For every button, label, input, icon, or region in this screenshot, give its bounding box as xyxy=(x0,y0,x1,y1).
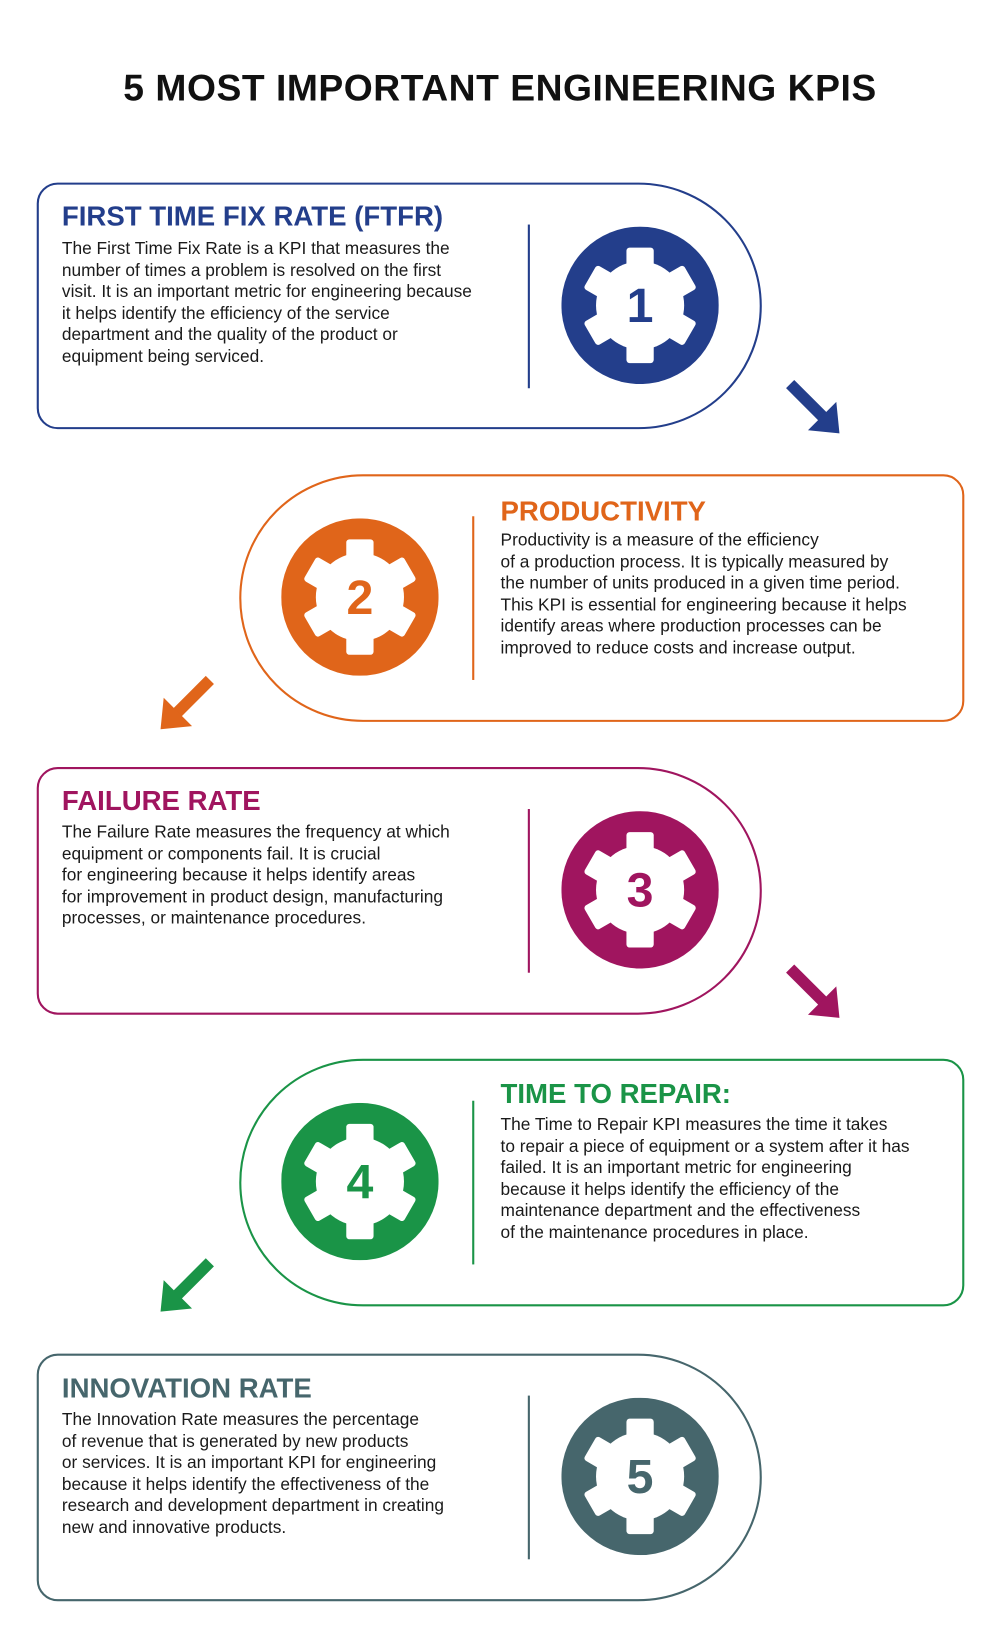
text: productivity: improved to reduce costs and increase output. xyxy=(501,639,856,658)
icon: gear 4: 4 xyxy=(346,1155,373,1209)
text: productivity: Productivity is a measure of the efficiency xyxy=(501,531,819,550)
heading: failure rate: FAILURE RATE xyxy=(62,785,261,816)
arrow 4 xyxy=(160,1258,214,1312)
text: time to repair: to repair a piece of equipment or a system after it has xyxy=(501,1137,910,1156)
text: time to repair xyxy=(500,1115,910,1242)
text: productivity: identify areas where production processes can be xyxy=(501,617,882,636)
panel: failure rate xyxy=(37,767,762,1015)
text: productivity xyxy=(500,531,907,658)
text: failure rate: equipment or components fail. It is crucial xyxy=(62,844,380,863)
text: innovation rate: of revenue that is generated by new products xyxy=(62,1432,408,1451)
text: innovation rate: research and development department in creating xyxy=(62,1497,444,1516)
text: failure rate: processes, or maintenance procedures. xyxy=(62,909,366,928)
title: 5 MOST IMPORTANT ENGINEERING KPIS xyxy=(123,67,877,109)
panel: time to repair xyxy=(239,1059,964,1306)
text: innovation rate: because it helps identify the effectiveness of the xyxy=(62,1475,429,1494)
panel: innovation rate xyxy=(37,1354,762,1601)
heading: productivity: PRODUCTIVITY xyxy=(501,495,706,527)
icon: gear 2: 2 xyxy=(346,571,373,625)
text: failure rate: The Failure Rate measures the frequency at which xyxy=(62,823,450,842)
text: time to repair: maintenance department and the effectiveness xyxy=(501,1202,860,1221)
text: time to repair: The Time to Repair KPI measures the time it takes xyxy=(501,1115,887,1134)
text: productivity: of a production process. It is typically measured by xyxy=(501,553,888,571)
arrow 3 xyxy=(786,964,840,1018)
icon: gear 1 xyxy=(561,226,719,384)
heading: time to repair: TIME TO REPAIR: xyxy=(501,1078,731,1109)
text: innovation rate: The Innovation Rate measures the percentage xyxy=(62,1410,419,1429)
icon: gear 2 xyxy=(281,518,439,676)
panel: first time fix rate xyxy=(37,183,762,429)
text: FTFR: number of times a problem is resolved on the first xyxy=(62,261,441,280)
icon: gear 3: 3 xyxy=(627,864,654,918)
arrow 2 xyxy=(160,676,214,730)
text: FTFR: equipment being serviced. xyxy=(62,347,264,366)
text: innovation rate: new and innovative products. xyxy=(62,1518,286,1537)
text: time to repair: failed. It is an important metric for engineering xyxy=(501,1159,852,1178)
text: innovation rate xyxy=(62,1410,444,1537)
heading: FTFR: FIRST TIME FIX RATE (FTFR) xyxy=(62,200,443,232)
text: FTFR: visit. It is an important metric for engineering because xyxy=(62,282,472,301)
text: FTFR: The First Time Fix Rate is a KPI that measures the xyxy=(62,239,450,258)
text: productivity: the number of units produced in a given time period. xyxy=(501,574,900,593)
icon: gear 5: 5 xyxy=(627,1450,654,1504)
heading: innovation rate: INNOVATION RATE xyxy=(62,1373,312,1404)
arrow 1 xyxy=(786,380,840,434)
text: time to repair: because it helps identify the efficiency of the xyxy=(501,1180,839,1199)
text: FTFR: department and the quality of the product or xyxy=(62,326,398,345)
text: productivity: This KPI is essential for engineering because it helps xyxy=(501,596,907,615)
panel: productivity xyxy=(239,474,964,722)
text: innovation rate: or services. It is an important KPI for engineering xyxy=(62,1454,436,1472)
icon: gear 3 xyxy=(561,811,719,968)
text: failure rate xyxy=(62,823,450,928)
text: failure rate: for improvement in product design, manufacturing xyxy=(62,887,443,906)
icon: gear 5 xyxy=(561,1398,719,1556)
text: FTFR: it helps identify the efficiency of the service xyxy=(62,304,390,323)
text: time to repair: of the maintenance procedures in place. xyxy=(501,1223,809,1242)
icon: gear 1: 1 xyxy=(627,279,654,333)
text: failure rate: for engineering because it helps identify areas xyxy=(62,866,415,885)
text: FTFR xyxy=(62,239,472,366)
icon: gear 4 xyxy=(281,1102,439,1260)
